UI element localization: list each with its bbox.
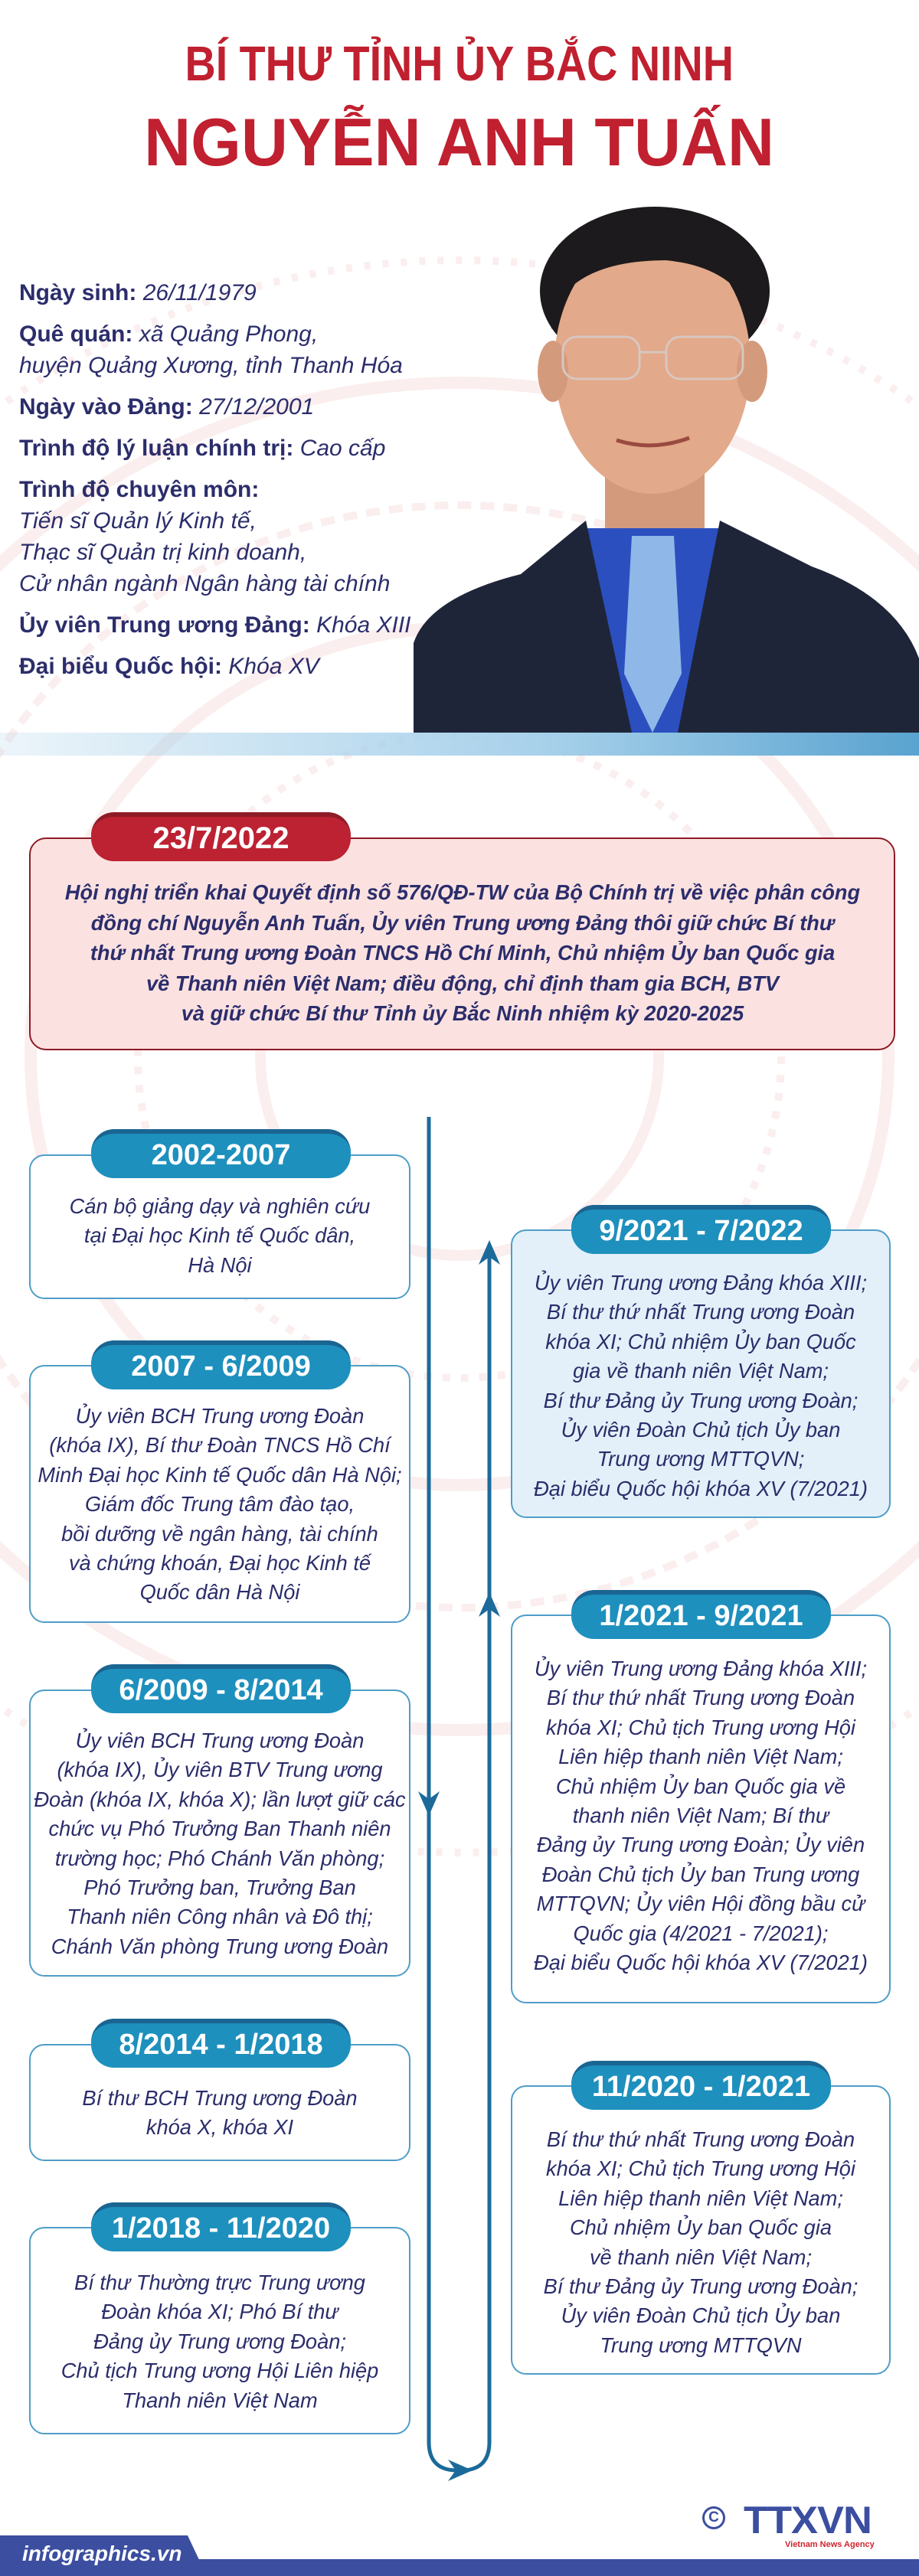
tie <box>624 536 682 733</box>
panel: 2007 - 6/2009: và chứng khoán, Đại học Kinh tế <box>69 1551 371 1575</box>
education: Tiến sĩ Quản lý Kinh tế, <box>19 508 257 534</box>
panel: 11/2020 - 1/2021 <box>511 2061 891 2375</box>
footer: infographics.vn <box>0 2535 199 2565</box>
panel: 1/2021 - 9/2021: MTTQVN; Ủy viên Hội đồng bầu cử <box>537 1892 865 1915</box>
central committee: Ủy viên Trung ương Đảng: Khóa XIII <box>19 612 410 638</box>
panel: 1/2021 - 9/2021: Ủy viên Trung ương Đảng khóa XIII; <box>535 1657 867 1680</box>
panel: 11/2020 - 1/2021: 11/2020 - 1/2021 <box>592 2071 810 2103</box>
highlight text: Hội nghị triển khai Quyết định số 576/QĐ-TW của Bộ Chính trị về việc phân công <box>64 880 860 904</box>
panel: 2007 - 6/2009: (khóa IX), Bí thư Đoàn TNCS Hồ Chí <box>49 1433 391 1457</box>
panel: 6/2009 - 8/2014: Ủy viên BCH Trung ương Đoàn <box>76 1729 364 1752</box>
red date tab <box>91 812 351 861</box>
birth date: Ngày sinh: 26/11/1979 <box>19 280 257 305</box>
logo: TTXVN <box>702 2499 875 2549</box>
panel: 9/2021 - 7/2022: Trung ương MTTQVN; <box>597 1447 804 1471</box>
panel: 2002-2007: tại Đại học Kinh tế Quốc dân, <box>84 1223 355 1247</box>
hair back <box>540 207 770 375</box>
panel: 11/2020 - 1/2021: Bí thư Đảng ủy Trung ương Đoàn; <box>544 2274 858 2298</box>
panel: 1/2021 - 9/2021: thanh niên Việt Nam; Bí thư <box>573 1804 829 1827</box>
panel: 2007 - 6/2009: Quốc dân Hà Nội <box>140 1580 299 1604</box>
highlight text: về Thanh niên Việt Nam; điều động, chỉ định tham gia BCH, BTV <box>146 971 778 995</box>
mouth <box>616 438 689 446</box>
panel: 2007 - 6/2009: 2007 - 6/2009 <box>131 1350 311 1383</box>
panel: 11/2020 - 1/2021: Ủy viên Đoàn Chủ tịch Ủy ban <box>561 2303 840 2327</box>
panel: 6/2009 - 8/2014: trường học; Phó Chánh Văn phòng; <box>55 1846 384 1870</box>
panel: 2007 - 6/2009: Minh Đại học Kinh tế Quốc dân Hà Nội; <box>38 1463 402 1487</box>
panel: 11/2020 - 1/2021: về thanh niên Việt Nam; <box>590 2245 812 2269</box>
panel: 11/2020 - 1/2021: Liên hiệp thanh niên Việt Nam; <box>558 2186 843 2210</box>
hair front <box>551 226 758 329</box>
panel: 1/2021 - 9/2021 <box>511 1590 891 2003</box>
panel: 6/2009 - 8/2014: Thanh niên Công nhân và Đô thị; <box>67 1905 373 1928</box>
panel: 2002-2007 <box>29 1129 410 1299</box>
education: Thạc sĩ Quản trị kinh doanh, <box>19 540 306 565</box>
panel: 11/2020 - 1/2021: khóa XI; Chủ tịch Trung ương Hội <box>546 2156 855 2180</box>
panel: 9/2021 - 7/2022: Bí thư thứ nhất Trung ương Đoàn <box>547 1300 855 1324</box>
panel: 1/2018 - 11/2020: Đảng ủy Trung ương Đoàn; <box>93 2330 346 2353</box>
panel: 8/2014 - 1/2018: 8/2014 - 1/2018 <box>119 2029 323 2061</box>
title line 2: name: NGUYỄN ANH TUẤN <box>145 104 774 180</box>
highlight text: thứ nhất Trung ương Đoàn TNCS Hồ Chí Minh, Chủ nhiệm Ủy ban Quốc gia <box>90 941 835 965</box>
panel: 8/2014 - 1/2018: Bí thư BCH Trung ương Đoàn <box>82 2086 358 2110</box>
panel: 1/2021 - 9/2021: Đại biểu Quốc hội khóa XV (7/2021) <box>534 1951 868 1974</box>
panel: 1/2018 - 11/2020: Bí thư Thường trực Trung ương <box>74 2271 365 2294</box>
panel: 2007 - 6/2009: Giám đốc Trung tâm đào tạo, <box>85 1492 355 1516</box>
panel: 9/2021 - 7/2022: Đại biểu Quốc hội khóa XV (7/2021) <box>534 1477 868 1500</box>
panel: 1/2021 - 9/2021: Đảng ủy Trung ương Đoàn; Ủy viên <box>537 1833 865 1856</box>
panel: 2007 - 6/2009: Ủy viên BCH Trung ương Đoàn <box>76 1404 364 1428</box>
panel: 6/2009 - 8/2014: 6/2009 - 8/2014 <box>119 1674 323 1706</box>
panel: 11/2020 - 1/2021: Trung ương MTTQVN <box>600 2333 802 2357</box>
neck <box>605 444 705 551</box>
hometown <box>19 322 403 378</box>
panel: 11/2020 - 1/2021: Chủ nhiệm Ủy ban Quốc gia <box>570 2215 832 2239</box>
logo: TTXVN: TTXVN <box>744 2499 872 2542</box>
title <box>145 36 774 180</box>
highlight text <box>64 880 860 1025</box>
panel: 6/2009 - 8/2014: chức vụ Phó Trưởng Ban Thanh niên <box>49 1817 391 1840</box>
panel: 1/2018 - 11/2020: 1/2018 - 11/2020 <box>112 2212 330 2245</box>
panel: 1/2018 - 11/2020: Đoàn khóa XI; Phó Bí thư <box>101 2300 338 2323</box>
shirt <box>571 528 735 733</box>
panel: 2002-2007: Hà Nội <box>188 1253 252 1277</box>
panel: 9/2021 - 7/2022: gia về thanh niên Việt Nam; <box>573 1359 829 1383</box>
panel: 9/2021 - 7/2022: Ủy viên Trung ương Đảng khóa XIII; <box>535 1271 867 1295</box>
highlight box <box>29 837 895 1050</box>
face <box>554 233 751 494</box>
highlight text: đồng chí Nguyễn Anh Tuấn, Ủy viên Trung ương Đảng thôi giữ chức Bí thư <box>90 911 834 934</box>
hometown: huyện Quảng Xương, tỉnh Thanh Hóa <box>19 353 403 378</box>
hometown: Quê quán: xã Quảng Phong, <box>19 322 318 347</box>
panel: 2007 - 6/2009 <box>29 1340 410 1623</box>
panel: 6/2009 - 8/2014: Chánh Văn phòng Trung ương Đoàn <box>51 1934 388 1958</box>
footer: infographics.vn: infographics.vn <box>22 2542 182 2565</box>
panel: 2002-2007: 2002-2007 <box>152 1139 290 1171</box>
panel: 1/2021 - 9/2021: 1/2021 - 9/2021 <box>599 1600 803 1632</box>
info list <box>19 280 410 679</box>
panel: 1/2021 - 9/2021: Bí thư thứ nhất Trung ương Đoàn <box>547 1686 855 1709</box>
education: Cử nhân ngành Ngân hàng tài chính <box>19 571 390 596</box>
panel: 9/2021 - 7/2022: Bí thư Đảng ủy Trung ương Đoàn; <box>544 1389 858 1412</box>
ears <box>538 341 568 402</box>
panel: 23/7/2022 highlight <box>29 812 895 1050</box>
portrait photo <box>414 207 919 733</box>
panel: 2002-2007: Cán bộ giảng dạy và nghiên cứu <box>70 1194 370 1218</box>
panel: 1/2021 - 9/2021: Chủ nhiệm Ủy ban Quốc gia về <box>556 1774 845 1798</box>
education: Trình độ chuyên môn: <box>19 477 259 502</box>
party date: Ngày vào Đảng: 27/12/2001 <box>19 394 314 420</box>
glasses <box>563 337 743 379</box>
panel: 8/2014 - 1/2018 <box>29 2019 410 2161</box>
panel: 6/2009 - 8/2014: (khóa IX), Ủy viên BTV Trung ương <box>57 1758 383 1781</box>
panel: 9/2021 - 7/2022: Ủy viên Đoàn Chủ tịch Ủy ban <box>561 1418 840 1441</box>
panel: 11/2020 - 1/2021: Bí thư thứ nhất Trung ương Đoàn <box>547 2127 855 2151</box>
blue band under photo <box>0 733 919 756</box>
national assembly: Đại biểu Quốc hội: Khóa XV <box>19 654 319 679</box>
suit <box>414 521 632 733</box>
panel: 1/2021 - 9/2021: Đoàn Chủ tịch Ủy ban Trung ương <box>542 1863 859 1886</box>
red date tab: 23/7/2022 <box>153 821 289 855</box>
highlight text: và giữ chức Bí thư Tỉnh ủy Bắc Ninh nhiệm kỳ 2020-2025 <box>181 1001 744 1025</box>
panel: 1/2021 - 9/2021: khóa XI; Chủ tịch Trung ương Hội <box>546 1716 855 1739</box>
panel: 1/2021 - 9/2021: Liên hiệp thanh niên Việt Nam; <box>558 1745 843 1768</box>
logo: TTXVN: C <box>708 2509 719 2525</box>
political theory: Trình độ lý luận chính trị: Cao cấp <box>19 436 385 461</box>
logo: TTXVN: Vietnam News Agency <box>785 2540 875 2549</box>
panel: 1/2018 - 11/2020 <box>29 2202 410 2434</box>
panel: 9/2021 - 7/2022: 9/2021 - 7/2022 <box>599 1215 803 1247</box>
panel: 9/2021 - 7/2022: khóa XI; Chủ nhiệm Ủy ban Quốc <box>545 1330 856 1353</box>
panel: 1/2018 - 11/2020: Chủ tịch Trung ương Hội Liên hiệp <box>61 2359 378 2382</box>
panel: 9/2021 - 7/2022 <box>511 1205 891 1518</box>
panel: 1/2021 - 9/2021: Quốc gia (4/2021 - 7/2021); <box>574 1921 828 1945</box>
panel: 6/2009 - 8/2014: Phó Trưởng ban, Trưởng Ban <box>83 1876 356 1899</box>
education <box>19 477 390 596</box>
panel: 6/2009 - 8/2014 <box>29 1664 410 1977</box>
title line 1: BÍ THƯ TỈNH ỦY BẮC NINH <box>185 36 734 91</box>
footer bar <box>0 2559 919 2576</box>
panel: 2007 - 6/2009: bồi dưỡng về ngân hàng, tài chính <box>61 1522 378 1546</box>
panel: 1/2018 - 11/2020: Thanh niên Việt Nam <box>122 2388 318 2412</box>
panel: 6/2009 - 8/2014: Đoàn (khóa IX, khóa X); lần lượt giữ các <box>34 1788 406 1811</box>
panel: 8/2014 - 1/2018: khóa X, khóa XI <box>146 2115 293 2139</box>
